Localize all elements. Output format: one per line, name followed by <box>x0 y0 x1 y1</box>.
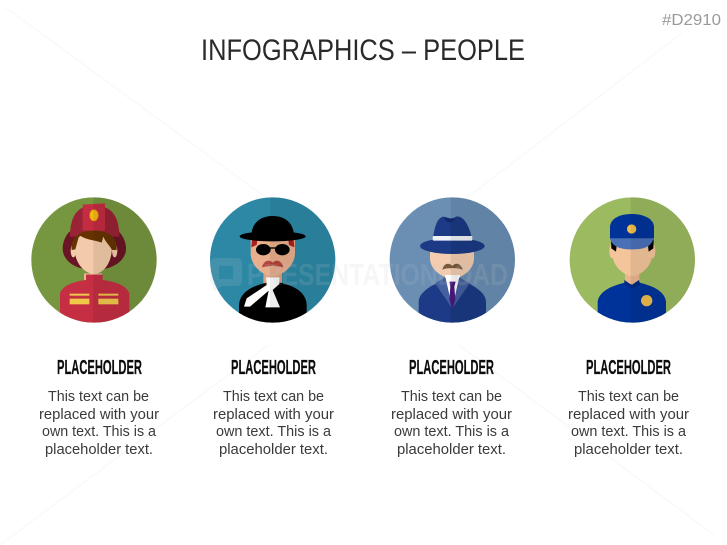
body text: own text. This is a <box>571 423 687 440</box>
icon: police officer <box>568 197 704 323</box>
icon: watermark logo <box>210 258 242 292</box>
body text: placeholder text. <box>397 441 506 458</box>
icon: detective in black <box>210 197 343 323</box>
icon: firefighter <box>30 197 163 323</box>
panel: inspector in blue <box>388 197 524 458</box>
body text: This text can be <box>401 388 502 405</box>
product code: #D2910 <box>662 12 721 29</box>
body text: replaced with your <box>568 406 689 423</box>
body text: replaced with your <box>39 406 159 423</box>
body text: replaced with your <box>213 406 334 423</box>
watermark text: PRESENTATIONLOAD <box>247 257 508 292</box>
body text: This text can be <box>223 388 324 405</box>
heading: PLACEHOLDER <box>409 357 494 379</box>
heading: PLACEHOLDER <box>57 357 142 379</box>
panel: firefighter <box>30 197 163 458</box>
body text <box>213 388 334 458</box>
body text: own text. This is a <box>42 423 157 440</box>
body text: own text. This is a <box>394 423 510 440</box>
body text: placeholder text. <box>45 441 153 458</box>
body text <box>391 388 512 458</box>
body text <box>568 388 689 458</box>
body text: placeholder text. <box>574 441 683 458</box>
icon: inspector in blue <box>388 197 524 323</box>
body text: This text can be <box>578 388 679 405</box>
body text: This text can be <box>48 388 149 405</box>
heading: PLACEHOLDER <box>231 357 316 379</box>
panel: detective in black <box>210 197 343 458</box>
watermark <box>210 257 508 292</box>
body text: own text. This is a <box>216 423 332 440</box>
panel: police officer <box>568 197 704 458</box>
title: INFOGRAPHICS – PEOPLE <box>201 34 525 67</box>
body text: replaced with your <box>391 406 512 423</box>
body text <box>39 388 159 458</box>
body text: placeholder text. <box>219 441 328 458</box>
